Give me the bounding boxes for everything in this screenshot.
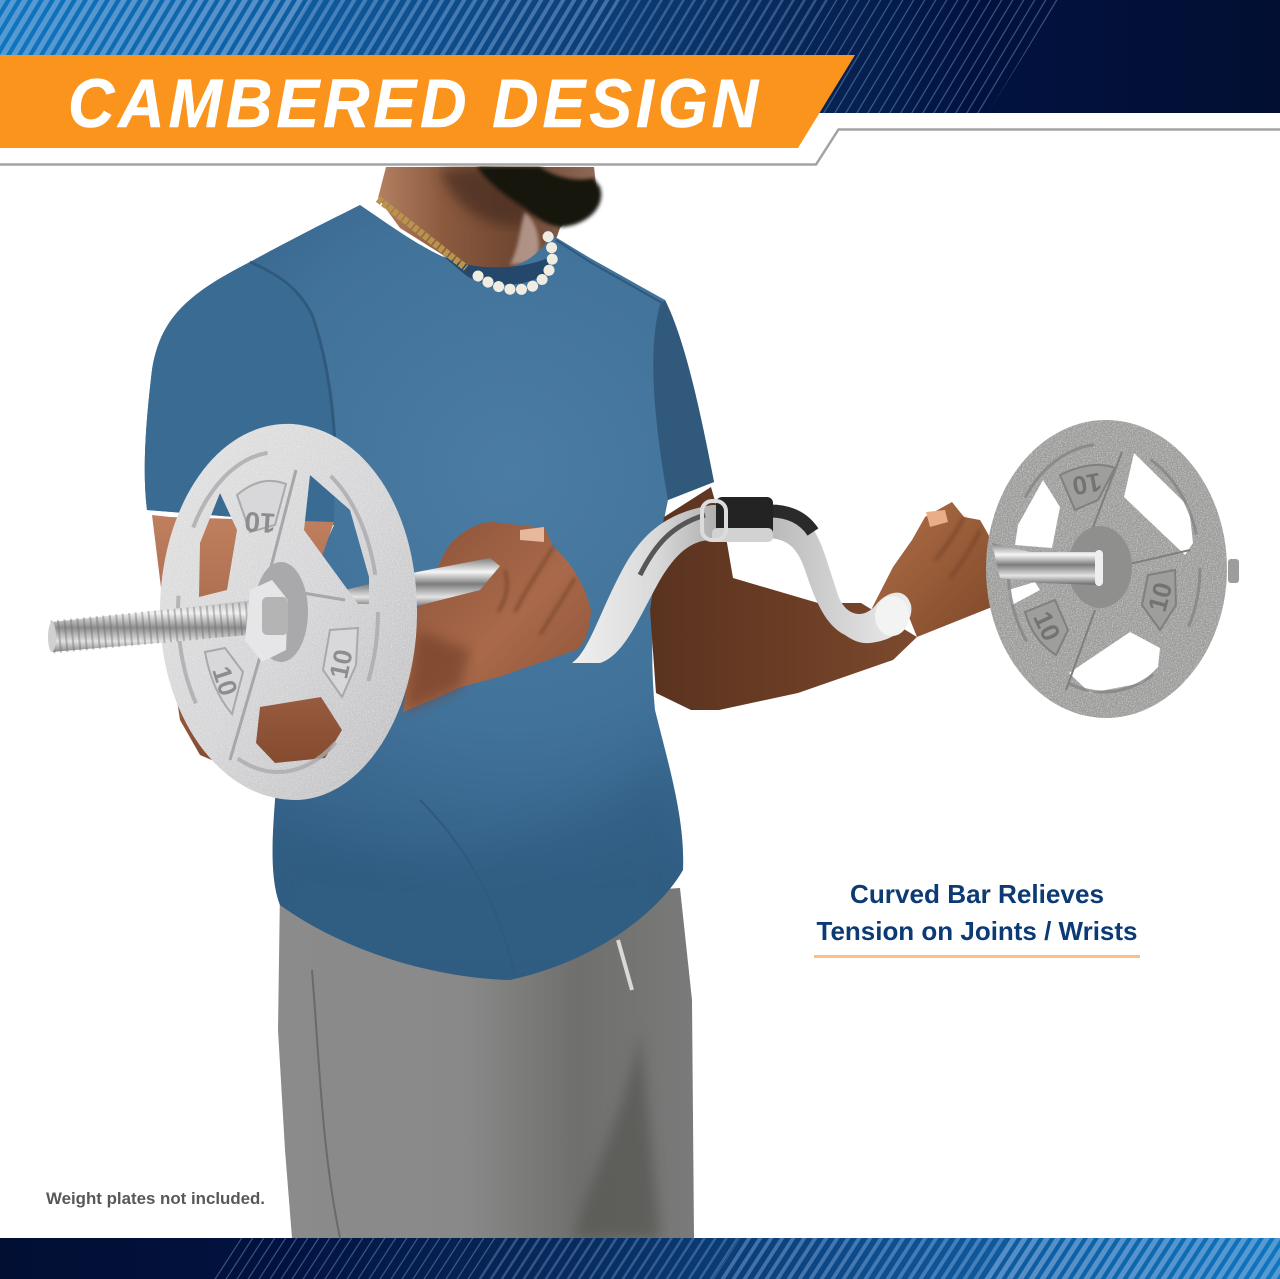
plate tag: lower left: 10 [206, 663, 244, 699]
callout: curved bar: Curved Bar Relieves [850, 879, 1104, 909]
person [145, 167, 1005, 1238]
left arm behind plate [152, 515, 345, 785]
neck and head [378, 167, 601, 272]
plate tag: top [1060, 465, 1115, 510]
necklace [378, 199, 552, 290]
right weight plate [986, 420, 1239, 718]
threaded bar end [48, 580, 288, 662]
footnote: Weight plates not included. [46, 1189, 265, 1208]
plate tag: lower left: 10 [1027, 607, 1067, 645]
right bar stud [1228, 559, 1239, 583]
left bar segment [345, 558, 500, 608]
right hand [871, 502, 990, 637]
grip collar [702, 497, 773, 542]
title: CAMBERED DESIGN [68, 66, 760, 143]
right bar segment [992, 543, 1103, 586]
plate tag: right [1142, 570, 1178, 630]
header band [0, 0, 1280, 113]
plate hub [1068, 526, 1132, 608]
plate tag: top [237, 481, 286, 539]
callout: curved bar [814, 879, 1140, 958]
title banner [0, 55, 1280, 165]
shirt [145, 205, 714, 1000]
plate tag: top: 10 [1070, 467, 1104, 501]
plate tag: lower left [1025, 600, 1068, 655]
left weight plate [48, 424, 417, 800]
plate tag: lower right [323, 628, 359, 697]
plate tag: lower left [205, 648, 244, 714]
callout: curved bar: Tension on Joints / Wrists [816, 916, 1138, 946]
plate hub [254, 562, 308, 662]
beard [477, 167, 601, 227]
cambered bar [572, 497, 911, 663]
pants [278, 888, 694, 1238]
left hand [403, 522, 591, 712]
plate tag: lower right: 10 [323, 647, 359, 681]
plate tag: right: 10 [1142, 579, 1178, 615]
plate tag: top: 10 [243, 506, 277, 539]
inner collar [442, 255, 548, 285]
footer band [0, 1238, 1280, 1279]
right arm [650, 487, 917, 710]
